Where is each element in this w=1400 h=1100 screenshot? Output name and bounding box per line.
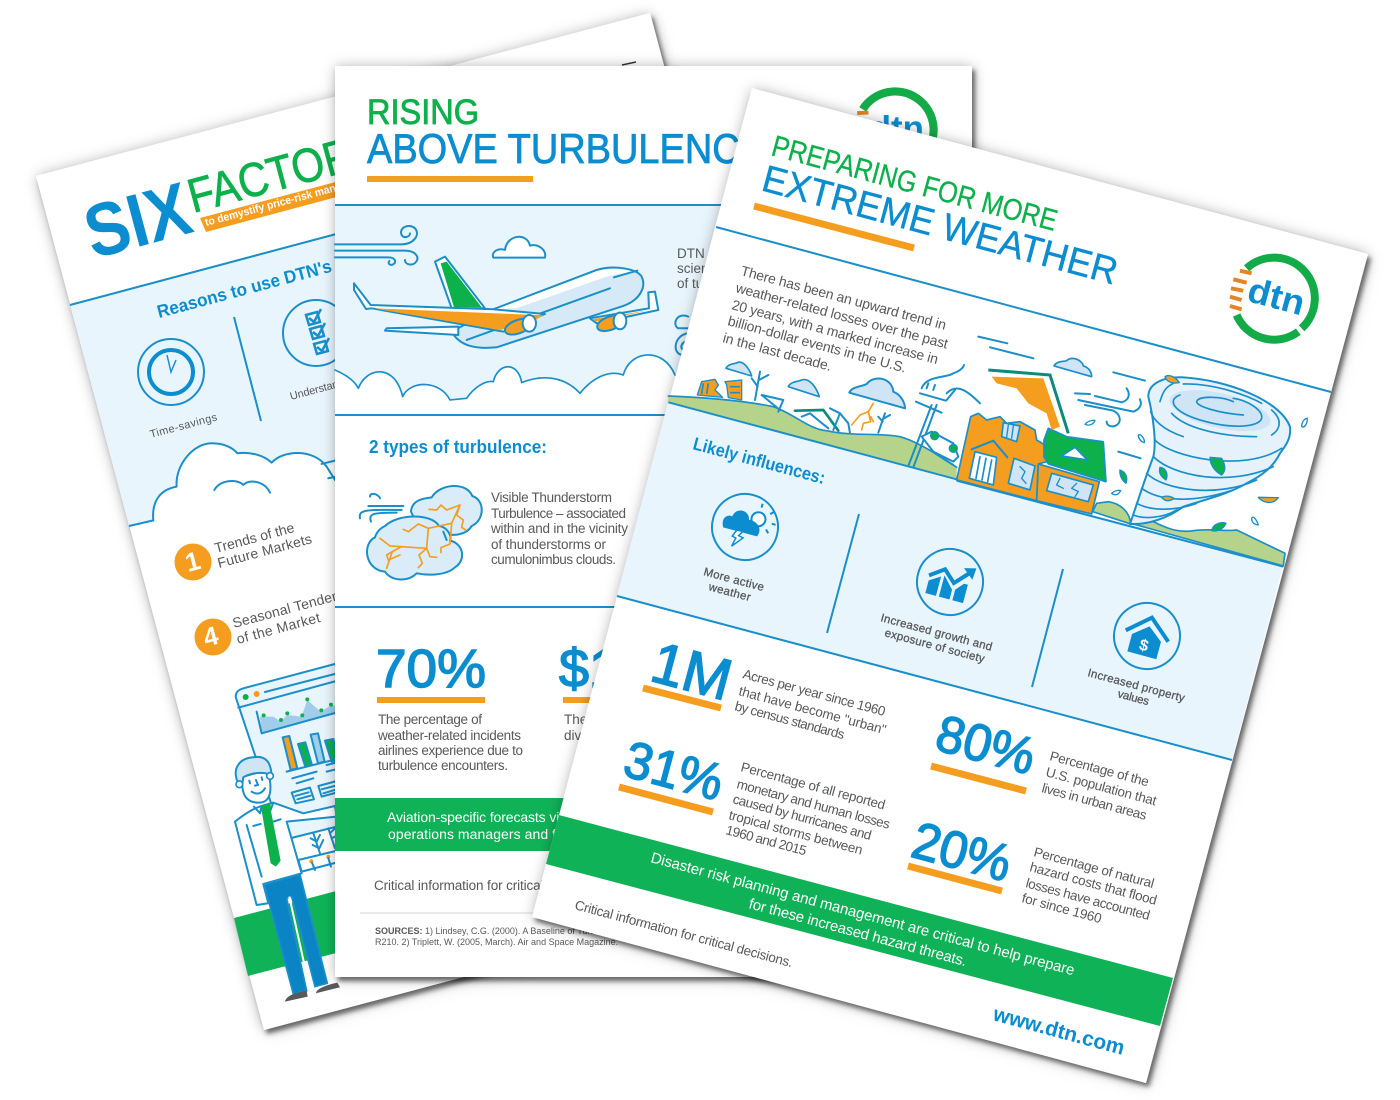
green band: aviation forecasts bbox=[335, 798, 972, 851]
title: rising above turbulence bbox=[367, 93, 765, 182]
stat: 1M: by census standards bbox=[733, 698, 846, 742]
panel: likely influences bbox=[617, 402, 1283, 760]
stat: 31 percent: Percentage of all reported bbox=[739, 759, 887, 812]
green band: disaster risk: for these increased hazard threats. bbox=[747, 895, 969, 970]
tagline: Critical information for critical decisions. bbox=[374, 878, 606, 893]
tagline: Critical information for critical decisions. bbox=[573, 897, 794, 970]
intro paragraph: weather-related losses over the past bbox=[733, 279, 950, 352]
illustration: house and tornado bbox=[957, 337, 1307, 567]
tie bbox=[261, 803, 281, 867]
right wing bbox=[590, 292, 658, 323]
shirt bbox=[235, 803, 337, 905]
cloud bbox=[1054, 358, 1092, 377]
heading: likely influences: Likely influences: bbox=[691, 434, 828, 488]
green band: aviation forecasts: operations managers and flight bbox=[388, 826, 582, 842]
list item 4: Seasonal Tendencies bbox=[231, 580, 366, 631]
head bbox=[236, 757, 273, 803]
stat: 31 percent: 1960 and 2015 bbox=[724, 822, 808, 858]
text: visible thunderstorm turbulence: Visible Thunderstorm bbox=[491, 490, 612, 505]
green band: aviation forecasts: Aviation-specific forecasts via bbox=[387, 809, 567, 825]
stat: 31 percent: tropical storms between bbox=[727, 807, 864, 858]
title: six factors: to demystify price-risk man bbox=[204, 182, 337, 229]
list item 4: 4 bbox=[200, 620, 222, 653]
intro text: DTN bbox=[677, 246, 705, 261]
shoes bbox=[285, 983, 340, 1002]
title: preparing for more extreme weather: PREPARING FOR MORE bbox=[768, 130, 1061, 238]
stat: 70 percent: 70% bbox=[376, 639, 486, 699]
fuselage bbox=[452, 268, 643, 348]
wrecked buildings bbox=[697, 379, 742, 400]
hill bbox=[668, 396, 957, 478]
stat: dollars bbox=[559, 639, 671, 743]
icon: wind right bbox=[675, 316, 688, 355]
stat: 80 percent: Percentage of the bbox=[1048, 748, 1151, 789]
panel: reasons: Understanding bbox=[289, 373, 359, 403]
stat: 80 percent bbox=[930, 705, 1158, 823]
list item 1 bbox=[174, 519, 313, 580]
stat: 20 percent: Percentage of natural bbox=[1032, 844, 1156, 891]
stat: 80 percent: lives in urban areas bbox=[1040, 780, 1149, 823]
panel: front page, extreme weather bbox=[532, 88, 1368, 1083]
panel: reasons: Time-savings bbox=[149, 411, 219, 441]
panel: back page, six factors bbox=[36, 13, 878, 1030]
stat: 1M: that have become "urban" bbox=[737, 683, 888, 737]
title: preparing for more extreme weather: EXTREME WEATHER bbox=[758, 158, 1122, 293]
icon: clock bbox=[138, 339, 204, 405]
utility pole bbox=[908, 383, 946, 467]
icon: checklist bbox=[283, 300, 349, 366]
stat: dollars: diverted bbox=[564, 728, 612, 743]
logo: dtn: dtn bbox=[1244, 271, 1309, 323]
text: visible thunderstorm turbulence: cumulonimbus clouds. bbox=[491, 552, 616, 567]
stat: 31 percent: caused by hurricanes and bbox=[731, 791, 873, 843]
stat: 80 percent: U.S. population that bbox=[1044, 764, 1158, 808]
hill right bbox=[1093, 502, 1131, 524]
stat: 31 percent bbox=[618, 731, 892, 858]
sources bbox=[375, 926, 622, 947]
stat: 70 percent bbox=[376, 639, 523, 773]
icon: thunderstorm clouds bbox=[360, 486, 482, 579]
trousers bbox=[264, 874, 327, 994]
lightning bbox=[852, 403, 873, 430]
label: exposure of society bbox=[883, 627, 986, 666]
green band: disaster risk: Disaster risk planning and management are critical to help prepare bbox=[649, 849, 1076, 979]
sources: R210. 2) Triplett, W. (2005, March). Air and Space Magazine. bbox=[375, 937, 618, 947]
logo: dtn: dtn bbox=[870, 110, 924, 147]
green band: disaster risk bbox=[546, 815, 1173, 1026]
title: six factors: SIX bbox=[75, 166, 200, 274]
white cloud bbox=[153, 443, 430, 567]
label: More active bbox=[702, 566, 765, 594]
label: weather bbox=[706, 581, 752, 604]
title: six factors bbox=[75, 121, 400, 274]
stat: 1M bbox=[643, 630, 888, 742]
panel: reasons bbox=[70, 233, 430, 567]
text: visible thunderstorm turbulence: Turbulence – associated bbox=[491, 506, 626, 521]
stat: 1M: 1M bbox=[645, 630, 739, 713]
icon: property value bbox=[1107, 596, 1187, 676]
stat: 70 percent: weather-related incidents bbox=[377, 728, 521, 743]
stat: 70 percent: airlines experience due to bbox=[378, 743, 523, 758]
engines bbox=[503, 316, 534, 338]
green band bbox=[234, 890, 340, 976]
intro paragraph: billion-dollar events in the U.S. bbox=[726, 312, 908, 376]
intro text: scientists bbox=[677, 261, 733, 276]
stat: 20 percent: for since 1960 bbox=[1020, 890, 1103, 926]
intro paragraph: There has been an upward trend in bbox=[739, 262, 948, 333]
label: Increased growth and bbox=[879, 612, 993, 654]
stat: dollars: $1 bbox=[559, 639, 619, 699]
panel: plane bbox=[335, 205, 972, 415]
stat: 20 percent: 20% bbox=[906, 812, 1017, 893]
text: visible thunderstorm turbulence: within and in the vicinity bbox=[490, 521, 628, 536]
stat: 70 percent: turbulence encounters. bbox=[378, 758, 508, 773]
logo: dtn bbox=[1230, 258, 1315, 340]
dashboard screen bbox=[236, 663, 363, 840]
house bbox=[957, 370, 1106, 514]
title: rising above turbulence: RISING bbox=[367, 93, 479, 132]
illustration: man at dashboard bbox=[235, 663, 363, 1002]
stat: dollars: The bbox=[564, 712, 587, 727]
leaves bbox=[1085, 376, 1307, 531]
icon: active weather bbox=[705, 487, 785, 567]
intro paragraph: in the last decade. bbox=[721, 329, 834, 374]
wind lines bbox=[978, 337, 1145, 458]
stat: 31 percent: monetary and human losses bbox=[735, 776, 892, 832]
icon: wind bbox=[335, 226, 417, 265]
stat: 20 percent: losses have accounted bbox=[1024, 875, 1152, 923]
illustration: airplane and clouds bbox=[335, 226, 763, 414]
left wing bbox=[354, 283, 545, 332]
icon: growth bbox=[910, 542, 990, 622]
stat: 20 percent: hazard costs that flood bbox=[1028, 859, 1159, 908]
panel: middle page, turbulence bbox=[335, 66, 972, 977]
label: Increased property bbox=[1086, 667, 1186, 705]
title: six factors: FACTORS bbox=[182, 121, 387, 224]
sources: SOURCES: 1) Lindsey, C.G. (2000). A Baseline of Turbulence bbox=[375, 926, 622, 936]
icon: property value: $ bbox=[1137, 637, 1150, 655]
clouds bbox=[726, 362, 752, 376]
list item 1: 1 bbox=[182, 545, 204, 578]
logo: dtn bbox=[845, 83, 942, 179]
icon: cloud bbox=[493, 237, 545, 258]
intro paragraph: 20 years, with a marked increase in bbox=[730, 296, 940, 367]
overturned car bbox=[922, 432, 958, 465]
tornado bbox=[1130, 377, 1290, 524]
heading: 2 types of turbulence: 2 types of turbulence: bbox=[369, 437, 547, 457]
intro text bbox=[677, 246, 755, 291]
stat: 31 percent: 31% bbox=[618, 731, 729, 812]
plants bbox=[298, 828, 340, 872]
text: visible thunderstorm turbulence bbox=[490, 490, 628, 567]
url: www.dtn.com bbox=[990, 1002, 1127, 1060]
label: values bbox=[1116, 688, 1150, 708]
stat: 1M: Acres per year since 1960 bbox=[741, 666, 887, 719]
illustration: storm damage left bbox=[668, 362, 980, 479]
intro paragraph bbox=[721, 262, 950, 376]
list item 1: Trends of the bbox=[213, 519, 296, 556]
list item 4 bbox=[194, 580, 366, 656]
intro text: of turbulence bbox=[677, 276, 755, 291]
stat: 70 percent: The percentage of bbox=[378, 712, 482, 727]
list item 1: Future Markets bbox=[216, 530, 313, 571]
text: visible thunderstorm turbulence: of thunderstorms or bbox=[491, 537, 606, 552]
trees and debris bbox=[752, 372, 890, 433]
heading: reasons to use: Reasons to use DTN's bbox=[155, 256, 334, 322]
list item 4: of the Market bbox=[235, 609, 322, 647]
title: rising above turbulence: ABOVE TURBULENCE bbox=[367, 125, 765, 172]
stat: 20 percent bbox=[906, 812, 1159, 926]
stat: 80 percent: 80% bbox=[930, 705, 1041, 786]
tail bbox=[435, 257, 485, 308]
